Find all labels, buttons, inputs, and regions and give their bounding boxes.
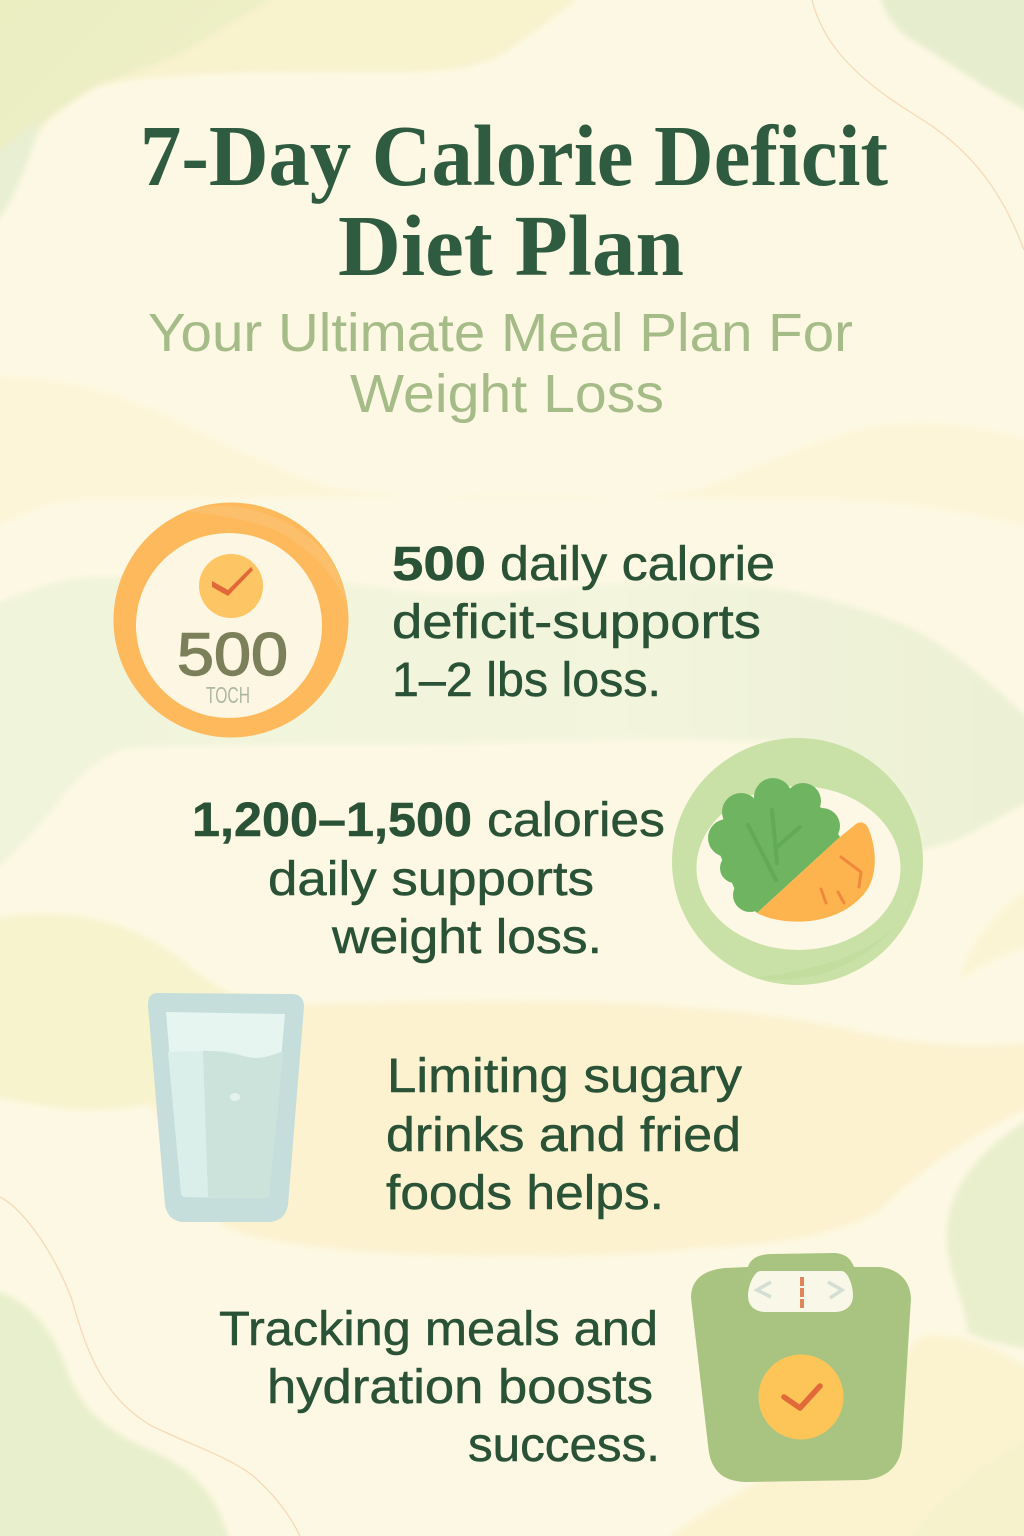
- icon: plate with lettuce and omelette: [672, 738, 923, 985]
- text: tracking meals: hydration boosts: [267, 1361, 653, 1414]
- omelette: [757, 822, 875, 922]
- text: tracking meals: Tracking meals and: [219, 1303, 658, 1356]
- text: 500 daily calorie deficit: 1–2 lbs loss.: [392, 654, 661, 707]
- text: 1,200-1,500 calories: calories: [487, 794, 665, 847]
- icon: check badge: [199, 554, 263, 618]
- text: limiting sugary drinks: drinks and fried: [386, 1109, 741, 1162]
- icon: 500 calorie badge: [114, 502, 348, 738]
- title: 7-Day Calorie Deficit: [140, 107, 888, 204]
- icon: weighing scale: [691, 1253, 911, 1482]
- text: 500 daily calorie deficit: daily calorie: [500, 538, 775, 591]
- text: 1,200-1,500 calories: 1,200–1,500: [192, 794, 472, 847]
- text: tracking meals: [219, 1303, 660, 1472]
- text: 500 daily calorie deficit: [392, 538, 775, 707]
- text: 500 daily calorie deficit: 500: [392, 538, 486, 591]
- lettuce leaf: [708, 778, 840, 913]
- title: [140, 107, 888, 294]
- text: limiting sugary drinks: [386, 1050, 742, 1220]
- text: tracking meals: success.: [468, 1419, 660, 1472]
- icon: glass of water: [148, 993, 304, 1222]
- text: 1,200-1,500 calories: weight loss.: [331, 911, 602, 964]
- text: 1,200-1,500 calories: daily supports: [268, 853, 594, 906]
- text: 1,200-1,500 calories: [192, 794, 665, 964]
- title: Diet Plan: [338, 197, 684, 294]
- text: 500 daily calorie deficit: deficit-supports: [392, 596, 761, 649]
- badge caption: TOCH: [206, 682, 250, 708]
- subtitle: [148, 303, 853, 424]
- text: limiting sugary drinks: Limiting sugary: [387, 1050, 742, 1103]
- scale display: [748, 1271, 853, 1312]
- text: limiting sugary drinks: foods helps.: [386, 1167, 664, 1220]
- subtitle: Weight Loss: [350, 364, 664, 424]
- scale check badge: [758, 1354, 844, 1440]
- subtitle: Your Ultimate Meal Plan For: [148, 303, 853, 363]
- badge number: 500: [177, 621, 288, 688]
